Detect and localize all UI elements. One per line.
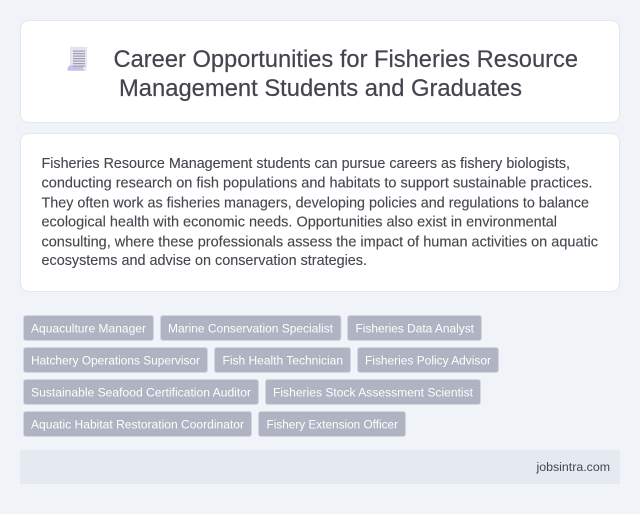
title: Career Opportunities for Fisheries Resource <box>114 46 578 73</box>
tag: Fish Health Technician <box>214 348 350 372</box>
tag: Hatchery Operations Supervisor <box>24 348 208 372</box>
tag: Fisheries Data Analyst: Fisheries Data Analyst <box>356 321 475 335</box>
tag: Aquaculture Manager <box>24 316 154 340</box>
text block: description: consulting, where these professionals assess the impact of human activities on aquatic <box>42 234 598 250</box>
tag: Fisheries Stock Assessment Scientist: Fisheries Stock Assessment Scientist <box>273 385 474 399</box>
text block: description <box>42 156 598 269</box>
tag: Fishery Extension Officer: Fishery Extension Officer <box>266 417 398 431</box>
footer bar <box>20 450 620 484</box>
tag: Hatchery Operations Supervisor: Hatchery Operations Supervisor <box>31 353 200 367</box>
tag: Aquatic Habitat Restoration Coordinator <box>24 412 252 436</box>
title <box>114 46 578 102</box>
tag: Sustainable Seafood Certification Auditor: Sustainable Seafood Certification Auditor <box>31 385 251 399</box>
tag: Fish Health Technician: Fish Health Technician <box>222 353 343 367</box>
panel: description card <box>20 134 620 292</box>
text block: description: conducting research on fish populations and habitats to support sustainable practices. <box>42 176 592 192</box>
tag: Fisheries Stock Assessment Scientist <box>266 380 480 404</box>
title: Management Students and Graduates <box>119 75 522 102</box>
text block: description: They often work as fisheries managers, developing policies and regulations to balance <box>42 195 589 211</box>
tag: Fisheries Policy Advisor <box>358 348 498 372</box>
tag: Marine Conservation Specialist: Marine Conservation Specialist <box>168 321 334 335</box>
tag: Fisheries Data Analyst <box>348 316 482 340</box>
tag: Sustainable Seafood Certification Auditor <box>24 380 258 404</box>
tag: Fishery Extension Officer <box>258 412 406 436</box>
footer source text: jobsintra.com <box>535 460 610 474</box>
tag: Aquaculture Manager: Aquaculture Manager <box>31 321 146 335</box>
tag: Aquatic Habitat Restoration Coordinator: Aquatic Habitat Restoration Coordinator <box>31 417 244 431</box>
tag: Marine Conservation Specialist <box>160 316 341 340</box>
text block: description: ecological health with economic needs. Opportunities also exist in environmental <box>42 215 557 231</box>
text block: description: ecosystems and advise on conservation strategies. <box>42 253 367 269</box>
career tags <box>24 316 498 436</box>
panel: header card <box>20 20 620 122</box>
icon: paper scroll <box>67 46 88 71</box>
text block: description: Fisheries Resource Management students can pursue careers as fishery biologists, <box>42 156 570 172</box>
tag: Fisheries Policy Advisor: Fisheries Policy Advisor <box>365 353 491 367</box>
